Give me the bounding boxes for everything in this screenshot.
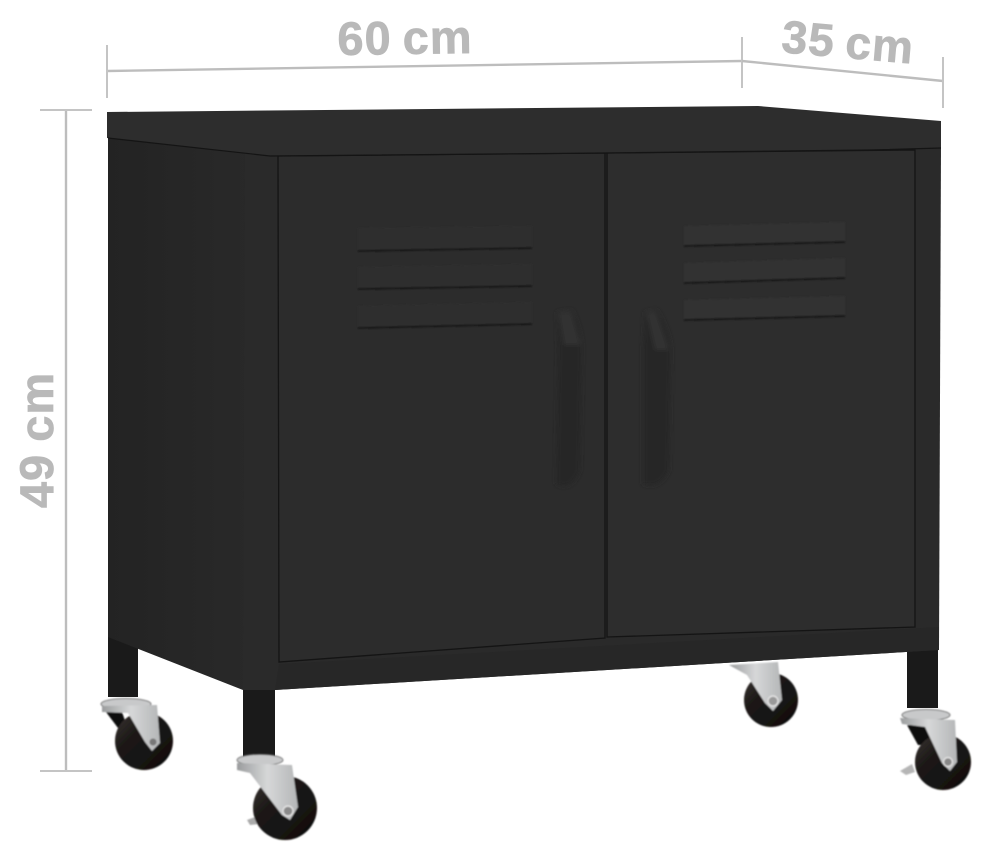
cabinet	[107, 106, 941, 758]
dimension: depth 35 cm: 35 cm	[780, 10, 916, 74]
left door	[278, 153, 605, 662]
dimension: width 60 cm: 60 cm	[337, 10, 473, 65]
front left leg	[243, 680, 275, 758]
left door vents	[358, 226, 532, 328]
lower frame rail	[275, 627, 939, 690]
dimension: width 60 cm	[107, 10, 742, 98]
dimension: depth 35 cm	[742, 10, 943, 108]
top shadow line	[108, 138, 941, 156]
rear left leg	[108, 625, 138, 697]
left handle	[556, 310, 582, 486]
side panel	[108, 136, 275, 690]
right door vents	[684, 222, 845, 320]
dimension: height 49 cm: 49 cm	[10, 372, 63, 508]
right leg	[907, 640, 938, 708]
caster: front left	[237, 754, 317, 840]
front frame	[243, 146, 941, 690]
right handle	[643, 310, 671, 485]
caster: front right	[900, 710, 971, 790]
caster: rear left	[101, 698, 173, 770]
right door	[607, 150, 915, 637]
cabinet top	[107, 106, 941, 156]
caster: rear right	[729, 662, 798, 727]
